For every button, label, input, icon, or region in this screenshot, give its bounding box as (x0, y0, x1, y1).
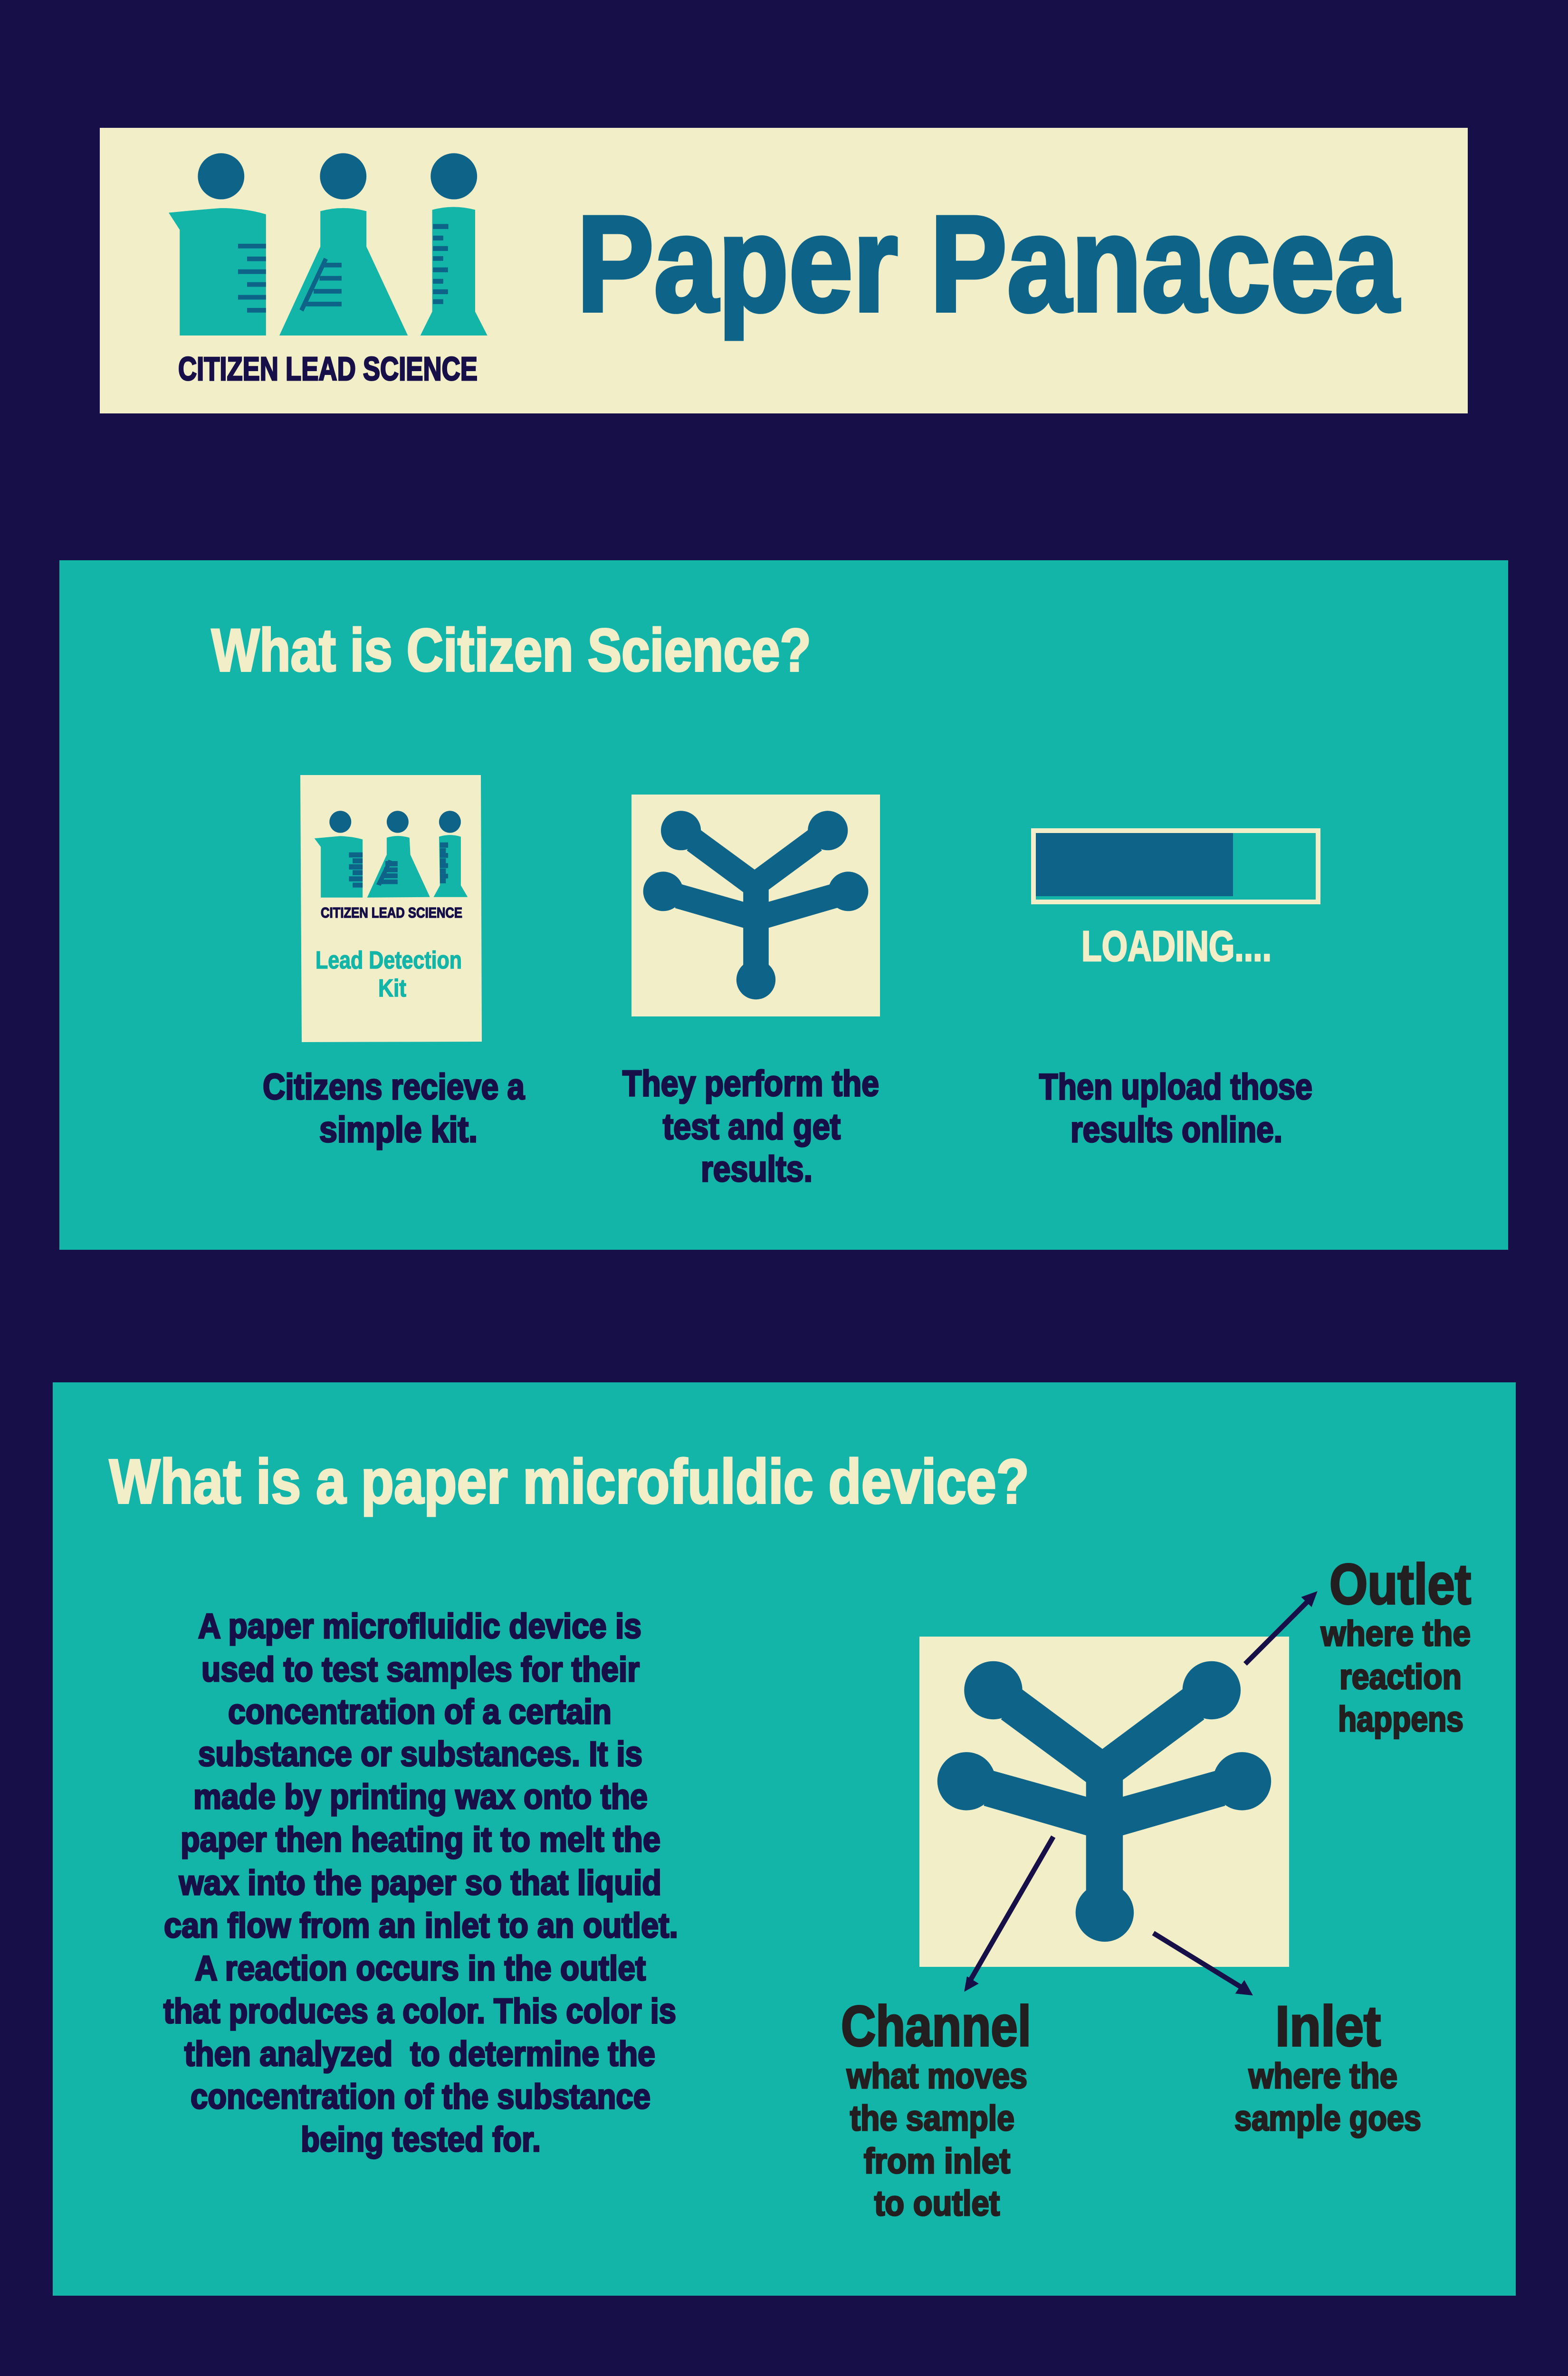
paragraph: being tested for. (301, 2120, 541, 2159)
caption: test (622, 1063, 879, 1189)
kit wordmark: CITIZEN LEAD SCIENCE (321, 904, 462, 921)
paragraph: concentration of a certain (228, 1693, 612, 1731)
caption: test: test and get (663, 1107, 841, 1147)
panel: header banner (100, 128, 1468, 413)
arrow: to inlet (1153, 1933, 1253, 1995)
label: inlet: sample goes (1234, 2098, 1421, 2138)
label: inlet (1234, 1994, 1421, 2138)
loading text: LOADING.... (1081, 923, 1272, 970)
label: inlet: Inlet (1275, 1994, 1381, 2058)
heading: paper microfluidic device: What is a paper microfuldic device? (109, 1447, 1029, 1516)
label: channel: from inlet (864, 2141, 1010, 2181)
caption: upload: Then upload those (1039, 1067, 1312, 1107)
loading bar (1033, 831, 1318, 902)
panel: what is citizen science (59, 560, 1508, 1250)
label: channel: the sample (850, 2098, 1014, 2138)
label: channel: Channel (841, 1994, 1031, 2058)
caption: upload: results online. (1071, 1110, 1282, 1150)
panel: what is a paper microfluidic device (53, 1382, 1516, 2296)
paragraph: A reaction occurs in the outlet (195, 1949, 646, 1988)
paragraph: used to test samples for their (201, 1650, 640, 1689)
icon: citizen lead science logo (169, 153, 488, 335)
label: outlet: where the (1320, 1614, 1471, 1653)
caption: kit (263, 1067, 525, 1150)
label: outlet: happens (1338, 1699, 1463, 1739)
label: channel: what moves (846, 2056, 1027, 2096)
label: channel: to outlet (874, 2184, 1000, 2223)
caption: test: They perform the (622, 1063, 879, 1104)
label: outlet: reaction (1339, 1657, 1462, 1696)
label: outlet (1320, 1552, 1471, 1739)
paragraph: substance or substances. It is (198, 1735, 642, 1773)
paragraph: can flow from an inlet to an outlet. (164, 1907, 678, 1945)
caption: kit: simple kit. (319, 1110, 478, 1150)
caption: kit: Citizens recieve a (263, 1067, 525, 1107)
paragraph (163, 1607, 678, 2159)
paragraph: wax into the paper so that liquid (179, 1864, 661, 1902)
kit illustration (300, 775, 482, 1042)
kit label second line: Kit (378, 975, 406, 1002)
label: inlet: where the (1248, 2056, 1397, 2096)
paragraph: then analyzed to determine the (184, 2035, 655, 2073)
paragraph: paper then heating it to melt the (181, 1820, 660, 1859)
diagram: microfluidic device (919, 1637, 1289, 1967)
kit label: Lead Detection (316, 947, 462, 974)
paragraph: made by printing wax onto the (193, 1778, 648, 1816)
label: channel (841, 1994, 1031, 2223)
title: Paper Panacea (577, 187, 1400, 341)
caption: upload (1039, 1067, 1312, 1150)
icon: kit logo (315, 811, 468, 898)
paragraph: concentration of the substance (191, 2078, 650, 2116)
paragraph: that produces a color. This color is (163, 1992, 676, 2031)
icon: microfluidic device small (631, 795, 880, 1016)
label: outlet: Outlet (1329, 1552, 1471, 1616)
heading: what is citizen science: What is Citizen Science? (211, 616, 811, 684)
logo wordmark: CITIZEN LEAD SCIENCE (178, 350, 478, 387)
paragraph: A paper microfluidic device is (198, 1607, 641, 1646)
arrow: to outlet (1245, 1591, 1318, 1664)
arrow: to channel (964, 1837, 1053, 1992)
caption: test: results. (701, 1149, 813, 1189)
